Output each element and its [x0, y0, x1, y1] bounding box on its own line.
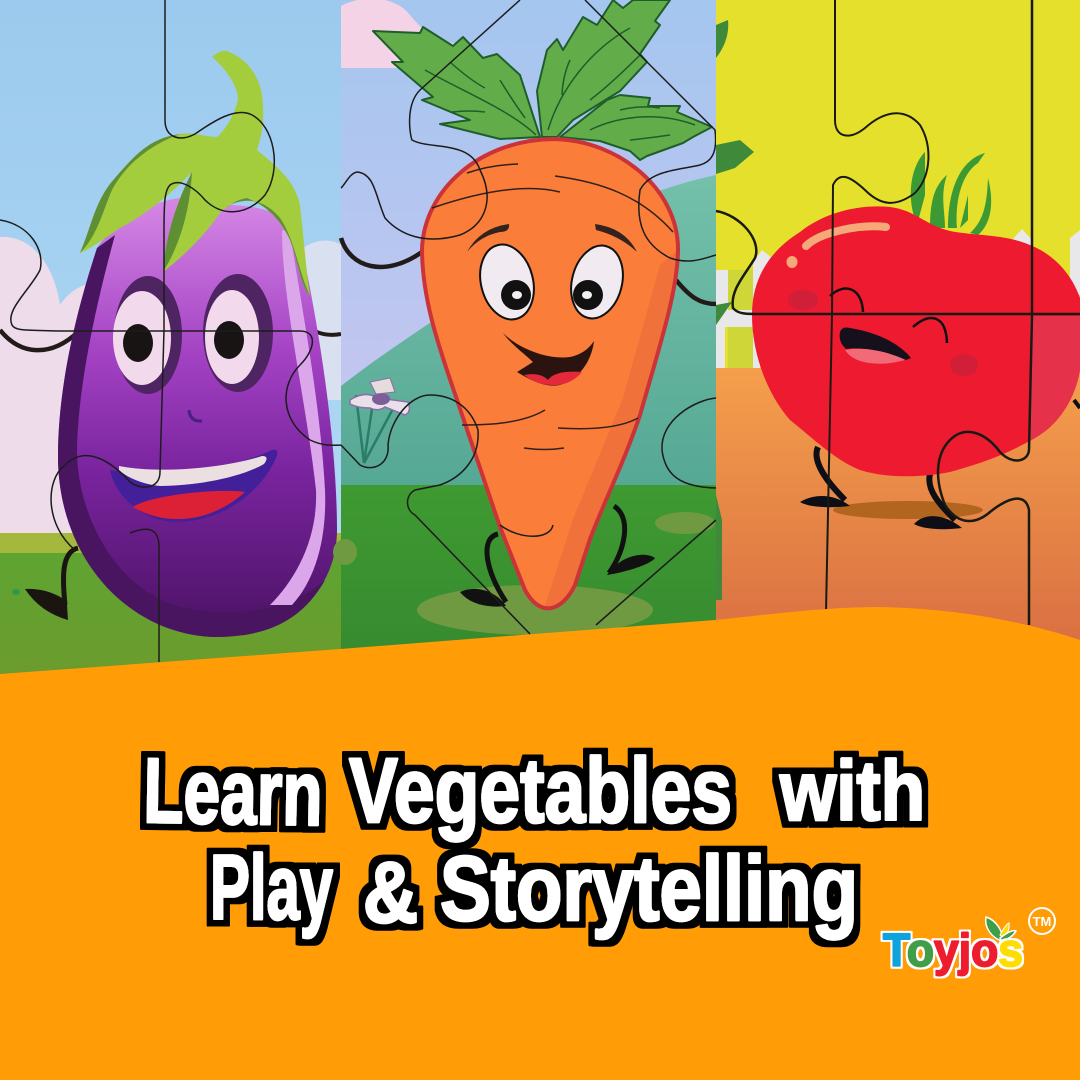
panel: carrot puzzle: [333, 0, 716, 660]
icon: tomato highlights: [786, 226, 886, 268]
icon: eggplant mouth: [110, 450, 277, 522]
orange banner: [0, 607, 1080, 1080]
icon: trademark badge: TM: [1033, 914, 1051, 929]
puzzle cut lines: eggplant: [0, 0, 345, 662]
title: Learn Vegetables with Play & Storytelling: [143, 740, 925, 941]
icon: tomato cheeks: [788, 290, 978, 376]
icon: eggplant nose: [189, 410, 202, 421]
icon: logo leaves: [986, 917, 1016, 941]
shadow: [833, 501, 983, 519]
hill: [341, 175, 716, 490]
logo: Toyjos: [883, 908, 1055, 976]
icon: tomato eyes: [830, 289, 947, 343]
icon: tomato legs: [800, 400, 1080, 529]
icon: eggplant right eye: [203, 274, 273, 392]
heading word: Play: Play: [210, 837, 333, 939]
icon: carrot right eye: [564, 240, 630, 324]
panel: tomato puzzle: [716, 0, 1080, 650]
logo wordmark: Toyjos: [883, 924, 1023, 976]
icon: trademark badge: [1029, 908, 1055, 934]
puzzle cut lines: tomato: [716, 0, 1080, 625]
icon: side leaves: [716, 20, 754, 600]
icon: tomato body: [752, 206, 1080, 476]
icon: carrot leaves: [373, 0, 712, 160]
icon: flower: [350, 378, 409, 463]
icon: carrot eyebrows: [467, 224, 637, 252]
icon: eggplant leaf shadow: [80, 134, 310, 296]
icon: eggplant body: [58, 197, 337, 637]
icon: eggplant arms and leg: [0, 326, 341, 620]
panel: eggplant puzzle: [0, 0, 345, 683]
heading word: Learn: Learn: [143, 740, 323, 845]
icon: eggplant left eye: [113, 276, 182, 394]
icon: carrot arms and legs: [341, 238, 716, 607]
icon: carrot left eye: [473, 239, 541, 325]
heading word: Storytelling: Storytelling: [440, 838, 858, 940]
heading word: Vegetables: Vegetables: [349, 740, 732, 842]
heading word: with: with: [779, 744, 925, 838]
icon: tomato stem leaves: [911, 152, 991, 235]
icon: carrot body: [422, 139, 700, 612]
icon: tomato mouth: [840, 328, 911, 364]
icon: carrot mouth: [503, 333, 594, 386]
fence: [716, 229, 1080, 368]
puzzle cut lines: carrot: [341, 0, 716, 634]
icon: eggplant leaf: [80, 51, 310, 296]
heading word: ampersand: &: [363, 845, 418, 941]
